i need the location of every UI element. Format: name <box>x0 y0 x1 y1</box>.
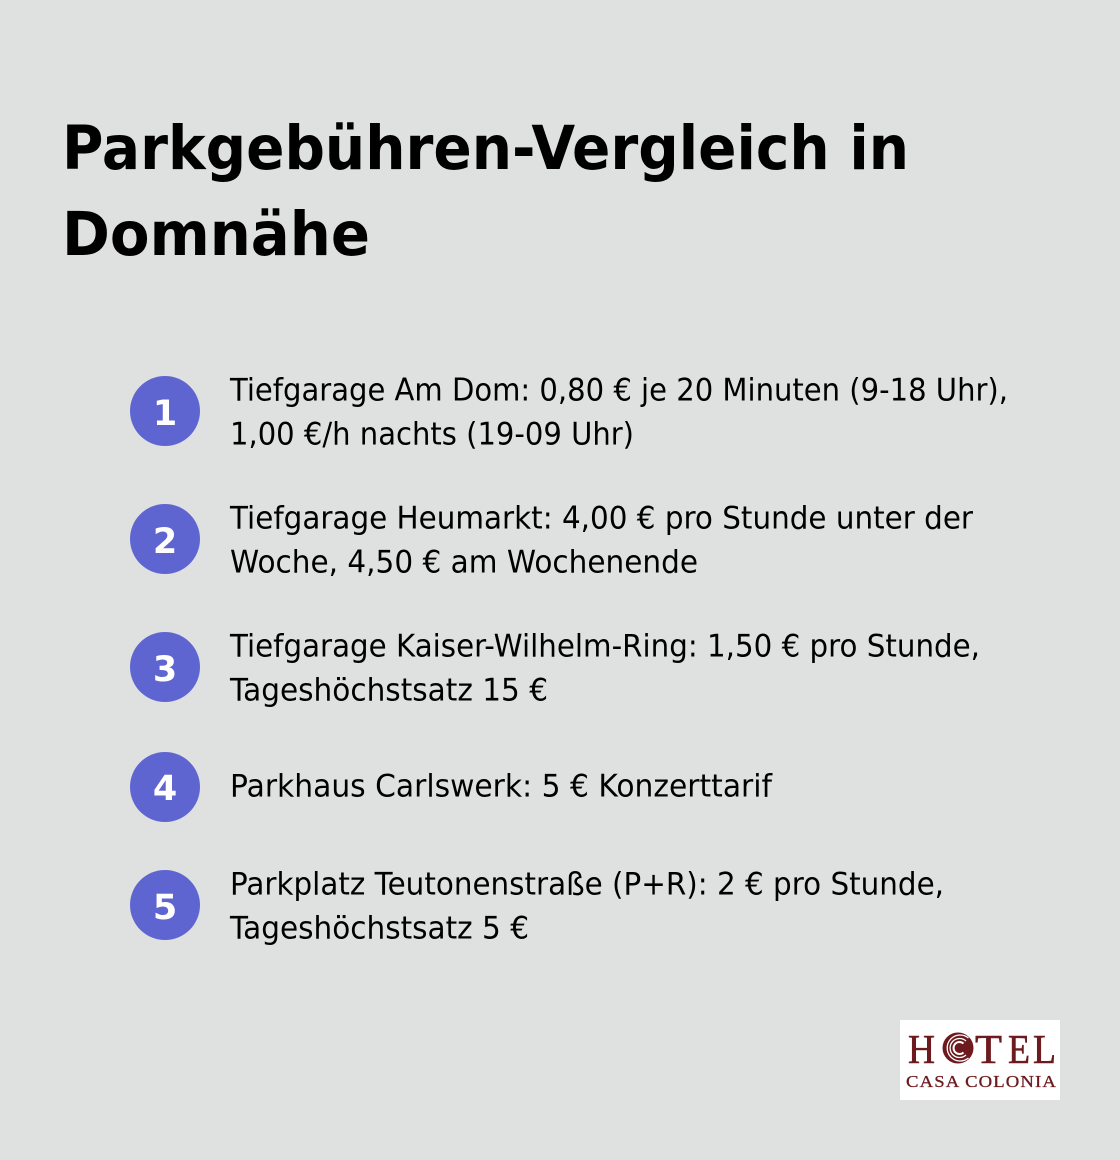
number badge 5 <box>130 870 200 940</box>
number badge 4: 4 <box>153 769 177 809</box>
logo wordmark HOTEL: E <box>1008 1026 1030 1072</box>
logo: Hotel Casa Colonia <box>900 1020 1060 1100</box>
list item 2 <box>130 500 973 580</box>
item 3 text <box>229 628 980 708</box>
logo wordmark HOTEL: L <box>1033 1026 1056 1072</box>
title: Parkgebühren-Vergleich in <box>62 113 909 184</box>
number badge 2 <box>130 504 200 574</box>
logo subtitle: CASA COLONIA <box>906 1072 1057 1091</box>
item 2 text <box>229 500 973 580</box>
logo wordmark HOTEL: T <box>975 1026 1002 1072</box>
item 1 text: 1,00 €/h nachts (19-09 Uhr) <box>230 416 634 452</box>
number badge 3 <box>130 632 200 702</box>
item 1 text <box>229 372 1008 452</box>
number badge 5: 5 <box>153 888 177 928</box>
number badge 3: 3 <box>153 650 177 690</box>
logo wordmark HOTEL: H <box>908 1026 935 1072</box>
item 3 text: Tageshöchstsatz 15 € <box>229 672 548 708</box>
item 5 text: Parkplatz Teutonenstraße (P+R): 2 € pro Stunde, <box>230 866 944 902</box>
title: Domnähe <box>62 199 370 270</box>
item 2 text: Tiefgarage Heumarkt: 4,00 € pro Stunde unter der <box>229 500 973 536</box>
title <box>62 113 909 270</box>
item 5 text: Tageshöchstsatz 5 € <box>229 910 529 946</box>
number badge 4 <box>130 752 200 822</box>
item 2 text: Woche, 4,50 € am Wochenende <box>230 544 698 580</box>
number badge 1 <box>130 376 200 446</box>
item 3 text: Tiefgarage Kaiser-Wilhelm-Ring: 1,50 € pro Stunde, <box>229 628 980 664</box>
item 1 text: Tiefgarage Am Dom: 0,80 € je 20 Minuten (9-18 Uhr), <box>229 372 1008 408</box>
list item 3 <box>130 628 980 708</box>
number badge 2: 2 <box>153 522 177 562</box>
list item 4 <box>130 752 773 822</box>
list item 1 <box>130 372 1008 452</box>
logo spiral emblem <box>942 1032 974 1064</box>
list item 5 <box>130 866 944 946</box>
item 5 text <box>229 866 944 946</box>
number badge 1: 1 <box>153 394 177 434</box>
item 4 text: Parkhaus Carlswerk: 5 € Konzerttarif <box>230 768 773 804</box>
logo wordmark HOTEL <box>908 1026 1056 1072</box>
